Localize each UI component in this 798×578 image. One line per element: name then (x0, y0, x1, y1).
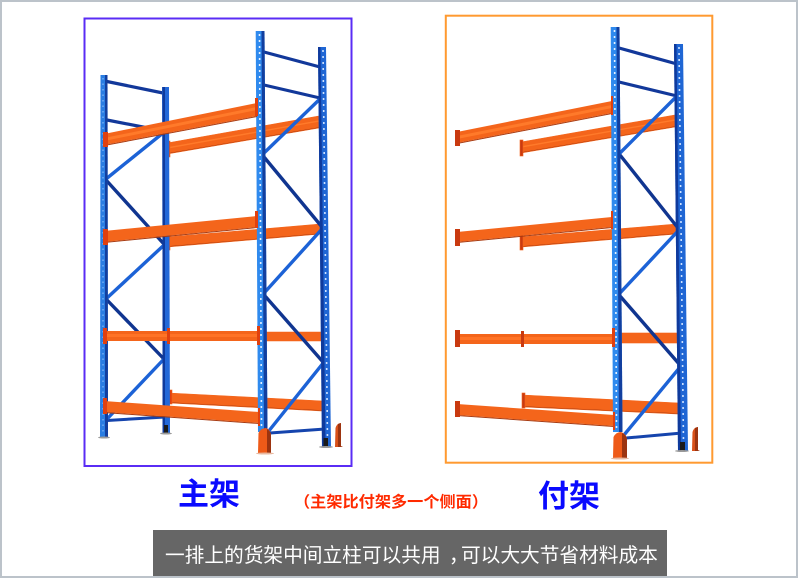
label: main rack: 主架 (178, 477, 240, 512)
note: main rack has one more side frame: （主架比付架多一个侧面） (294, 492, 488, 511)
label: secondary rack: 付架 (538, 479, 600, 514)
panel: secondary rack frame (446, 16, 712, 463)
frame horizontals (106, 52, 325, 433)
caption text: 可以大大节省材料成本 (461, 545, 658, 567)
frame horizontals (619, 48, 682, 438)
feet and column guards (611, 427, 700, 460)
panel: main rack frame (84, 18, 352, 466)
illustration: secondary rack (455, 27, 700, 460)
uprights (100, 31, 331, 447)
rear beams behind uprights (167, 116, 323, 411)
uprights (611, 27, 688, 451)
caption bar (153, 530, 667, 576)
illustration: main rack (98, 31, 343, 454)
feet and column guards (98, 423, 343, 454)
rear beams behind uprights (520, 115, 679, 414)
front beams (455, 96, 615, 430)
caption text: 一排上的货架中间立柱可以共用 (165, 545, 441, 567)
caption text: ， (449, 545, 469, 567)
front beams (103, 98, 260, 426)
